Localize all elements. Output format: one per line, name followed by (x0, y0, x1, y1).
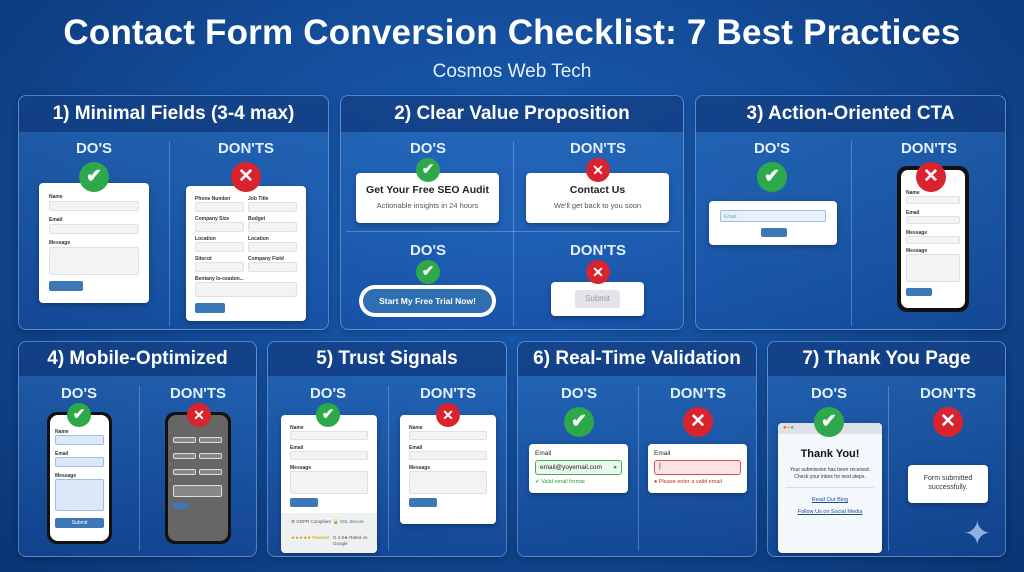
icon: check: ✔ (422, 161, 434, 178)
heading (268, 342, 506, 376)
icon: check (79, 162, 109, 192)
do label: DO'S (310, 385, 346, 402)
panel: 4 mobile optimized (18, 341, 257, 557)
dont label: DON'TS (901, 140, 957, 157)
icon: cross: ✕ (238, 166, 254, 187)
do card: Email (724, 214, 737, 220)
do form: Message (49, 240, 70, 246)
do email field valid: ✔ Valid email format (535, 479, 585, 485)
icon: cross: ✕ (442, 407, 454, 423)
panel: 6 real-time validation (517, 341, 757, 557)
heading: 6) Real-Time Validation (533, 348, 741, 369)
dont form: Message (409, 465, 430, 471)
icon: cross (933, 407, 963, 437)
heading (341, 96, 683, 132)
dont label: DON'TS (420, 385, 476, 402)
do card (709, 201, 837, 245)
do email field valid (529, 444, 628, 493)
do phone: Email (55, 451, 68, 457)
do form with badges: 🔒 SSL Secure (333, 519, 364, 524)
dont form: Name (409, 425, 423, 431)
icon: check (416, 260, 440, 284)
icon: sparkle: ✦ (963, 515, 992, 553)
dont phone (897, 166, 969, 312)
dont plain message (908, 465, 988, 503)
do form with badges: Message (290, 465, 311, 471)
panel: 7 thank you page (767, 341, 1006, 557)
dont card headline: We'll get back to you soon (554, 201, 641, 210)
dont label: DON'TS (170, 385, 226, 402)
do phone: Name (55, 429, 69, 435)
dont submit box (551, 282, 644, 316)
icon: cross (586, 260, 610, 284)
icon: check (67, 403, 91, 427)
dont label: DON'TS (670, 385, 726, 402)
icon: cross (916, 162, 946, 192)
icon: cross: ✕ (592, 264, 604, 280)
icon: cross: ✕ (690, 411, 706, 432)
heading (696, 96, 1005, 132)
do form with badges: Name (290, 425, 304, 431)
icon: check: ✔ (322, 406, 334, 423)
icon: check (564, 407, 594, 437)
icon: check: ✔ (86, 166, 102, 187)
dont plain message: successfully. (928, 484, 968, 491)
dont label top: DON'TS (570, 140, 626, 157)
icon: check: ✔ (571, 411, 587, 432)
icon: cross: ✕ (940, 411, 956, 432)
dont label: DON'TS (920, 385, 976, 402)
icon: check: ✔ (73, 406, 85, 423)
do form with badges (281, 415, 377, 553)
do card headline: Get Your Free SEO Audit (366, 184, 489, 196)
icon: cross: ✕ (592, 162, 604, 178)
heading: 5) Trust Signals (316, 348, 458, 369)
do form with badges: Email (290, 445, 303, 451)
dont plain message: Form submitted (924, 475, 972, 482)
do form with badges: ★★★★★ Reviews (291, 535, 329, 540)
do email field valid: ● (613, 464, 617, 471)
icon: check: ✔ (422, 263, 434, 280)
dont email field invalid: Email (654, 450, 670, 457)
dont form: Location (248, 236, 269, 242)
title: Contact Form Conversion Checklist: 7 Best Practices (63, 13, 961, 52)
heading: 3) Action-Oriented CTA (747, 103, 954, 124)
icon: cross (586, 158, 610, 182)
do form with badges: G 4.8★ Rated on Google (333, 535, 368, 546)
heading: 7) Thank You Page (802, 348, 971, 369)
dont form: Budget (248, 216, 265, 222)
dont form: Phone Number (195, 196, 231, 202)
do browser thank you: Follow Us on Social Media (798, 509, 862, 515)
do form (39, 183, 149, 303)
dont submit box: Submit (585, 294, 610, 303)
icon: cross: ✕ (923, 166, 939, 187)
do browser thank you: Thank You! (801, 448, 859, 460)
heading: 4) Mobile-Optimized (47, 348, 228, 369)
dont phone: Message (906, 248, 927, 254)
do email field valid: Email (535, 450, 551, 457)
dont form: Email (409, 445, 422, 451)
dont form (186, 186, 306, 321)
heading (768, 342, 1005, 376)
dont card headline (526, 173, 669, 223)
do browser thank you (778, 423, 882, 553)
heading (19, 342, 256, 376)
do cta pill: Start My Free Trial Now! (379, 296, 476, 306)
do form with badges: ⚙ GDPR Compliant (291, 519, 331, 524)
icon: cross: ✕ (193, 407, 205, 423)
heading (518, 342, 756, 376)
icon: check (416, 158, 440, 182)
dont email field invalid (648, 444, 747, 493)
dont phone: Name (906, 190, 920, 196)
panel: 2 clear value proposition (340, 95, 684, 330)
do label bottom: DO'S (410, 242, 446, 259)
do label: DO'S (754, 140, 790, 157)
dont form (400, 415, 496, 524)
icon: cross (683, 407, 713, 437)
do browser thank you: Read Our Blog (812, 497, 848, 503)
icon: cross (436, 403, 460, 427)
dont email field invalid: | (659, 463, 661, 470)
dont label: DON'TS (218, 140, 274, 157)
dont form: Job Title (248, 196, 268, 202)
dont form: Sitecot (195, 256, 212, 262)
do form: Email (49, 217, 62, 223)
dont form: Bentany lo-ceadon... (195, 276, 244, 282)
icon: check: ✔ (821, 411, 837, 432)
do card headline: Actionable insights in 24 hours (377, 201, 478, 210)
heading (19, 96, 328, 132)
dont phone: Message (906, 230, 927, 236)
icon: cross (187, 403, 211, 427)
do phone: Message (55, 473, 76, 479)
dont phone (165, 412, 231, 544)
panel: 1 minimal fields (18, 95, 329, 330)
dont form: Location (195, 236, 216, 242)
do label: DO'S (76, 140, 112, 157)
do browser thank you: ●●● (783, 425, 794, 431)
do browser thank you: Your submission has been received. (790, 467, 870, 473)
do cta pill (359, 285, 496, 317)
icon: check: ✔ (764, 166, 780, 187)
do email field valid: email@yoyemail.com (540, 464, 602, 471)
icon: check (316, 403, 340, 427)
do card headline (356, 173, 499, 223)
do phone: Submit (72, 520, 87, 526)
panel: 5 trust signals (267, 341, 507, 557)
do label: DO'S (61, 385, 97, 402)
do label top: DO'S (410, 140, 446, 157)
icon: check (757, 162, 787, 192)
heading: 1) Minimal Fields (3-4 max) (53, 103, 294, 124)
dont form: Company Size (195, 216, 229, 222)
do browser thank you: Check your inbox for next steps. (794, 474, 866, 480)
dont email field invalid: ● Please enter a valid email (654, 479, 722, 485)
dont phone: Email (906, 210, 919, 216)
dont label bottom: DON'TS (570, 242, 626, 259)
do label: DO'S (561, 385, 597, 402)
do form: Name (49, 194, 63, 200)
panel: 3 action-oriented CTA (695, 95, 1006, 330)
dont form: Company Field (248, 256, 284, 262)
heading: 2) Clear Value Proposition (394, 103, 630, 124)
icon: check (814, 407, 844, 437)
dont card headline: Contact Us (570, 184, 625, 196)
do label: DO'S (811, 385, 847, 402)
subtitle: Cosmos Web Tech (433, 61, 591, 82)
do phone (47, 412, 112, 544)
icon: cross (231, 162, 261, 192)
